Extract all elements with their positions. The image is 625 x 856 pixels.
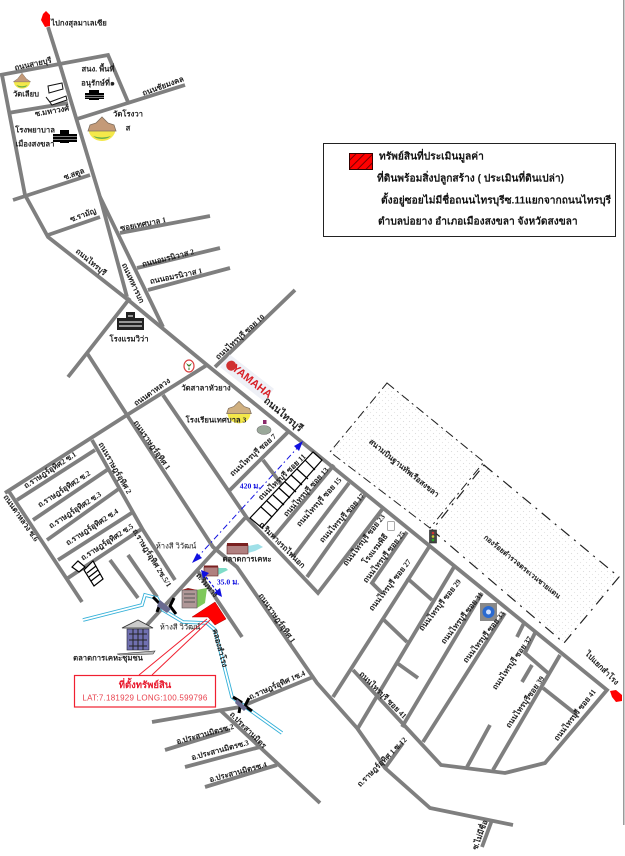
road and place labels: ไปกงสุลมาเลเซีย [50, 18, 107, 28]
road and place labels: ถนนไทรบุรี [73, 246, 109, 279]
icon: hotel building [117, 312, 144, 330]
road and place labels: ถนนทหารบก [120, 261, 146, 305]
road and place labels: ถนนอมรนิวาส 2 [141, 247, 195, 269]
road and place labels: ถนนไทรบุรี ซอย 33 [460, 609, 508, 665]
icon: small house shapes [46, 83, 67, 105]
road and place labels: ไปแยกสำโรง [583, 648, 622, 687]
road and place labels: โรงแรมพิธี [359, 531, 390, 567]
road and place labels: ถนนราษฎร์อุทิศ 1 [256, 592, 297, 645]
road and place labels: ถนนไทรบุรี ซอย 23 [340, 512, 388, 568]
road and place labels: ถนนไทรบุรี [261, 394, 307, 435]
icon: market building [227, 543, 263, 554]
road and place labels: กองร้อยตำรวจตระเวนชายแดน [482, 533, 563, 601]
restricted areas [330, 383, 619, 643]
icon: small market building [204, 566, 228, 576]
callout: property location [74, 676, 216, 707]
road and place labels: ถนนไทรบุรีซอย 39 [503, 674, 547, 730]
road and place labels: วัดสาลาหัวยาง [181, 384, 231, 392]
area: naval air base [330, 383, 484, 528]
icon: temple Wat Rong Wa [88, 117, 116, 141]
road and place labels: ถ.ประสานมิตร [228, 710, 269, 751]
road and place labels: ถ.ราษฎร์อุทิศ 1 ซ.12 [355, 735, 409, 789]
road and place labels: ถ.ราษฎร์อุทิศ2 ซ.5 [79, 522, 136, 563]
area: border patrol police [432, 465, 619, 643]
icon: office building [85, 90, 104, 100]
road and place labels: วัดโรงวา [113, 108, 143, 118]
road and place labels: อ.ประสานมิตรซ.4 [208, 760, 268, 784]
road and place labels: ตลาดการเคหะชุมชน [73, 654, 144, 664]
road and place labels: ถนนไทรบุรี ซอย 11 [256, 451, 308, 503]
road and place labels: ถนนตาหลวง ซ.6 [1, 493, 41, 543]
legend text [377, 148, 612, 228]
road and place labels: ห้างสี วิวัฒน์ [156, 542, 197, 550]
road and place labels: ถนนไทรบุรี ซอย 27 [366, 557, 414, 613]
icon: property marker [192, 602, 226, 625]
road and place labels: ถนนไทรบุรี ซอย 15 [294, 475, 344, 529]
road and place labels: ถนนตาหลวง [132, 376, 172, 408]
distance arrow: 35 m [201, 570, 222, 597]
callout leader [139, 619, 210, 675]
road and place labels: โรงพยาบาล [14, 124, 55, 134]
road and place labels: คลองสำโรง [211, 628, 230, 668]
road and place labels: ถ.ริมทางรถไฟนอก [257, 519, 308, 570]
icon: row houses [72, 452, 322, 586]
road and place labels: ถนนไทรบุรี ซอย 17 [317, 491, 367, 545]
icon: traffic light [430, 530, 436, 543]
road and place labels: ถนนไทรบุรี ซอย 31 [438, 590, 486, 646]
road and place labels: เมืองสงขลา [16, 140, 54, 148]
callout: property location: ที่ตั้งทรัพย์สิน [119, 677, 172, 691]
icon: Yamaha sign [220, 354, 275, 403]
legend [324, 144, 616, 236]
road and place labels: ซอยเทศบาล 1 [119, 215, 167, 233]
icon: red arrow south east [610, 690, 622, 702]
road and place labels: ถนนไทรบุรี ซอย 7 [227, 431, 279, 479]
road and place labels: ถ.ริมทาง [194, 571, 220, 599]
icon: red arrow north [41, 11, 50, 27]
icon: blue sign [480, 603, 497, 621]
road and place labels: อนุรักษ์ที่๑ [81, 76, 115, 88]
icon: bank [184, 360, 194, 372]
icon: hospital building [53, 130, 77, 143]
road and place labels: อ.ประสานมิตรซ.3 [190, 738, 250, 762]
road and place labels: 420 ม. [240, 482, 260, 490]
road and place labels: ถนนอมรนิวาส 1 [149, 266, 203, 286]
road and place labels: ถนนไทรบุรี ซอย 37 [489, 634, 535, 692]
legend swatch [350, 154, 372, 170]
road and place labels: 35.0 ม. [217, 578, 239, 586]
road and place labels: ห้างสี วิวัฒน์ [160, 622, 201, 632]
icon: bridge west [153, 597, 176, 614]
road and place labels: ถ.ราษฎร์อุทิศ2 ซ.3 [47, 490, 104, 531]
road and place labels: ถนนราษฎร์อุทิศ 2 [96, 440, 134, 496]
road and place labels: ซ.ไม่มีชื่อ [469, 818, 490, 851]
distance arrow: 420 m [192, 441, 303, 563]
road and place labels: สนามบินฐานทัพเรือสงขลา [367, 437, 441, 500]
road and place labels: ถนนไทรบุรี ซอย 10 [213, 312, 267, 362]
road and place labels: ถนนชัยมงคล [141, 74, 185, 98]
icon: hotel marker [388, 522, 394, 530]
legend text: ตำบลบ่อยาง อำเภอเมืองสงขลา จังหวัดสงขลา [378, 214, 578, 228]
road and place labels: ถ.ราษฎร์อุทิศ2 ซ.1 [22, 450, 79, 491]
road and place labels: ส [126, 124, 131, 132]
road and place labels: ถนนสายบุรี [14, 55, 53, 73]
canal [83, 595, 282, 733]
road and place labels: ถนนไทรบุรี ซอย 29 [416, 577, 464, 633]
icon: temple school [227, 401, 251, 423]
road and place labels: ซ.มหาวงศ์ [34, 103, 71, 118]
road and place labels: สนง. พื้นที่ [82, 62, 114, 74]
icon: crown [257, 420, 271, 434]
legend text: ทรัพย์สินที่ประเมินมูลค่า [379, 148, 484, 164]
icon: bridge south [233, 697, 252, 713]
legend text: ที่ดินพร้อมสิ่งปลูกสร้าง ( ประเมินที่ดินเปล่า) [377, 170, 564, 186]
road and place labels: ถนนราษฎร์อุทิศ 1 [131, 419, 172, 472]
road and place labels: วัดเลียบ [13, 90, 39, 98]
legend text: ตั้งอยู่ซอยไม่มีชื่อถนนไทรบุรีซ.11แยกจากถนนไทรบุรี [381, 192, 612, 208]
road and place labels: ถนนไทรบุรี ซอย 41 [357, 669, 409, 721]
road and place labels: ซ.สตูล [62, 166, 86, 183]
road and place labels: ถ.ราษฎร์อุทิศ2 ซ.4 [64, 507, 121, 548]
road and place labels: ถ.ราษฎร์อุทิศ 2ซ.5/1 [130, 527, 174, 589]
road and place labels: ถนนไทรบุรี ซอย 13 [281, 465, 331, 519]
road and place labels: ถ.ราษฎร์อุทิศ2 ซ.2 [36, 469, 93, 510]
road and place labels: โรงเรียนเทศบาล 3 [185, 414, 247, 424]
road and place labels: อ.ประสานมิตรซ.2 [175, 722, 235, 746]
road and place labels: ถนนไทรบุรี ซอย 25 [360, 529, 408, 585]
road and place labels: ซ.รามัญ [69, 206, 98, 224]
road and place labels: ตลาดการเคหะ [222, 554, 272, 564]
icon: Yamaha sign: YAMAHA [229, 362, 274, 401]
road and place labels: ถ.ราษฎร์อุทิศ 1ซ.4 [247, 668, 307, 702]
callout: property location: LAT:7.181929 LONG:100.599796 [82, 694, 208, 702]
icon: temple Wat Liab [13, 73, 31, 89]
road and place labels: โรงแรมวิว่า [108, 334, 149, 344]
icon: apartment [182, 588, 207, 608]
icon: community market [117, 620, 155, 655]
road and place labels: ถนนไทรบุรี ซอย 41 [551, 687, 599, 743]
